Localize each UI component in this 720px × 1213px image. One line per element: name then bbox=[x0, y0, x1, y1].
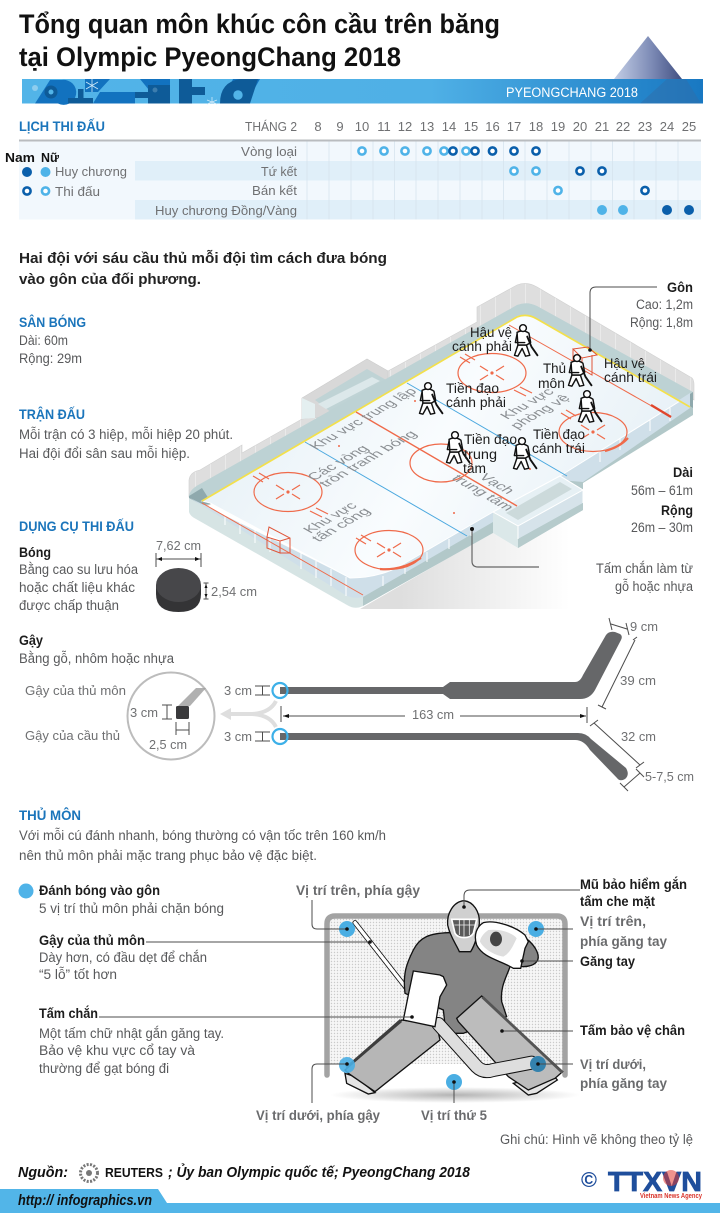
text block: goalie stick: Gậy của thủ môn bbox=[39, 933, 145, 948]
zone labels on ice bbox=[299, 385, 574, 544]
intro text: Hai đội với sáu cầu thủ mỗi đội tìm cách đưa bóng bbox=[19, 250, 387, 267]
table header months and days: 17 bbox=[507, 119, 521, 134]
text block: goalie stick bbox=[39, 933, 207, 982]
schedule dots: women rings bbox=[358, 147, 562, 194]
table header months and days: 8 bbox=[314, 119, 322, 134]
stick dimensions: 5-7,5 cm bbox=[645, 769, 694, 784]
text block: equipment: DỤNG CỤ THI ĐẤU bbox=[19, 518, 134, 534]
goalie labels: Mũ bảo hiểm gắn bbox=[580, 877, 687, 892]
callout: boards: gỗ hoặc nhựa bbox=[615, 579, 693, 594]
goalie labels: Vị trí trên, bbox=[580, 914, 646, 929]
table header months and days: 11 bbox=[377, 119, 391, 134]
banner: PyeongChang 2018: PYEONGCHANG 2018 bbox=[506, 85, 638, 100]
stick dimensions bbox=[224, 618, 694, 791]
table header months and days: 18 bbox=[529, 119, 543, 134]
front bench bbox=[493, 476, 583, 548]
legend: shots on goal bbox=[18, 883, 224, 916]
goalie labels: Găng tay bbox=[580, 954, 635, 969]
text block: stick: Gậy của thủ môn bbox=[25, 683, 126, 698]
footer bar: http:// infographics.vn bbox=[18, 1193, 152, 1209]
callout: rink size: 26m – 30m bbox=[631, 520, 693, 535]
goalie stick bbox=[280, 632, 622, 699]
title: Tổng quan môn khúc côn cầu trên băng bbox=[19, 9, 500, 39]
note: Ghi chú: Hình vẽ không theo tỷ lệ bbox=[500, 1132, 693, 1147]
goalie labels bbox=[256, 877, 687, 1123]
stick dimensions: 9 cm bbox=[630, 619, 658, 634]
legend: Thi đấu bbox=[55, 184, 100, 199]
callout: goal: Cao: 1,2m bbox=[636, 297, 693, 312]
ring markers bbox=[272, 683, 288, 744]
ice surface bbox=[202, 315, 680, 578]
heading: schedule: LỊCH THI ĐẤU bbox=[19, 118, 105, 134]
panel: schedule bbox=[5, 118, 701, 220]
goals bbox=[267, 347, 597, 553]
table header months and days: 14 bbox=[442, 119, 456, 134]
zone labels on ice: phòng vệ bbox=[506, 392, 574, 431]
table header months and days bbox=[245, 119, 696, 134]
footer bar bbox=[0, 1189, 720, 1213]
zone labels on ice: trung tâm bbox=[448, 472, 518, 513]
row labels bbox=[155, 144, 297, 218]
schedule dots: men rings bbox=[449, 147, 649, 194]
callout: rink size bbox=[631, 465, 693, 535]
player labels: môn bbox=[538, 376, 565, 391]
text block: equipment: Bóng bbox=[19, 545, 51, 560]
center dots bbox=[286, 371, 595, 552]
zone labels on ice: Vạch bbox=[476, 471, 519, 496]
goalie labels: Vị trí trên, phía gậy bbox=[296, 883, 420, 898]
text block: blocker: Bảo vệ khu vực cổ tay và bbox=[39, 1043, 195, 1058]
goalie labels: phía găng tay bbox=[580, 1076, 667, 1091]
banner: PyeongChang 2018 bbox=[22, 79, 703, 105]
glass panel lines bbox=[225, 408, 670, 596]
player labels: cánh trái bbox=[532, 441, 585, 456]
stick cross-section magnifier: 2,5 cm bbox=[149, 737, 187, 752]
goalie body bbox=[404, 933, 510, 1033]
source line bbox=[18, 1163, 471, 1182]
shot spots bbox=[339, 921, 546, 1090]
players bbox=[420, 325, 601, 469]
text block: goalie: Với mỗi cú đánh nhanh, bóng thường có vận tốc trên 160 km/h bbox=[19, 828, 386, 843]
face-off circles bbox=[253, 354, 628, 570]
logo: TTXVN: © bbox=[581, 1169, 598, 1192]
text block: stick: Bằng gỗ, nhôm hoặc nhựa bbox=[19, 651, 174, 666]
blocker bbox=[403, 971, 447, 1027]
table rows bbox=[19, 142, 701, 220]
logo: TTXVN: TTXVN bbox=[608, 1166, 702, 1197]
stick cross-section magnifier bbox=[128, 672, 214, 760]
text block: goalie bbox=[19, 806, 386, 863]
text block: stick bbox=[19, 633, 174, 743]
icon: puck bbox=[156, 538, 257, 612]
zone labels on ice: Khu vực bbox=[496, 386, 557, 421]
stick dimensions: 3 cm bbox=[224, 683, 252, 698]
title bbox=[19, 9, 500, 72]
callout: rink size: 56m – 61m bbox=[631, 483, 693, 498]
rink front glass bbox=[190, 393, 690, 598]
player labels: Hậu vệ bbox=[604, 356, 645, 371]
rink glass corners bbox=[189, 488, 212, 505]
title: tại Olympic PyeongChang 2018 bbox=[19, 42, 401, 72]
player labels: Tiền đạo bbox=[446, 381, 499, 396]
row labels: Bán kết bbox=[252, 183, 297, 198]
text block: equipment: hoặc chất liệu khác bbox=[19, 580, 135, 595]
source line: ; Ủy ban Olympic quốc tế; PyeongChang 2018 bbox=[168, 1163, 471, 1181]
legend: shots on goal: Đánh bóng vào gôn bbox=[39, 883, 160, 898]
player labels: cánh phải bbox=[446, 395, 506, 410]
callout: boards: Tấm chắn làm từ bbox=[596, 561, 693, 576]
icon: puck: 2,54 cm bbox=[211, 584, 257, 599]
player labels: trung bbox=[464, 447, 497, 462]
text block: blocker bbox=[39, 1006, 224, 1076]
stick dimensions: 32 cm bbox=[621, 729, 656, 744]
stick dimensions: 163 cm bbox=[412, 707, 454, 722]
goalie arm bbox=[517, 938, 538, 967]
legend: shots on goal: 5 vị trí thủ môn phải chặn bóng bbox=[39, 901, 224, 916]
table header months and days: THÁNG 2 bbox=[245, 119, 297, 134]
text block: match bbox=[19, 405, 233, 461]
text block: rink: Rộng: 29m bbox=[19, 351, 82, 366]
left leg pad bbox=[345, 1019, 440, 1094]
legend: Nữ bbox=[41, 150, 60, 165]
goalie labels: Vị trí dưới, bbox=[580, 1057, 646, 1072]
player labels: Tiền đạo bbox=[464, 432, 517, 447]
rink lines bbox=[202, 315, 690, 595]
rink slab: left side bbox=[189, 495, 363, 608]
legend: Nam bbox=[5, 150, 35, 165]
player labels: Hậu vệ bbox=[470, 325, 512, 340]
arrow: to cross-section bbox=[220, 701, 276, 727]
stick cross-section magnifier: 3 cm bbox=[130, 705, 158, 720]
text block: rink bbox=[19, 313, 86, 366]
player labels: tâm bbox=[463, 461, 486, 476]
player stick bbox=[280, 733, 628, 780]
goal net and frame bbox=[327, 916, 565, 1075]
catching glove bbox=[475, 922, 528, 968]
table header months and days: 25 bbox=[682, 119, 696, 134]
icon: mountain bbox=[614, 36, 682, 79]
text block: blocker: Một tấm chữ nhật gắn găng tay. bbox=[39, 1026, 224, 1041]
source line: REUTERS bbox=[105, 1165, 163, 1180]
stick dimensions: 39 cm bbox=[620, 673, 656, 688]
leader lines bbox=[99, 890, 580, 1103]
goalie labels: Vị trí dưới, phía gậy bbox=[256, 1108, 380, 1123]
text block: match: Hai đội đổi sân sau mỗi hiệp. bbox=[19, 446, 190, 461]
row labels: Tứ kết bbox=[261, 164, 297, 179]
helmet bbox=[448, 901, 479, 952]
table header months and days: 24 bbox=[660, 119, 674, 134]
rink back bench bbox=[302, 359, 388, 419]
zone labels on ice: Khu vực trung lập bbox=[305, 385, 420, 452]
player labels: cánh trái bbox=[604, 370, 657, 385]
player labels: cánh phải bbox=[452, 339, 512, 354]
row labels: Vòng loại bbox=[241, 144, 297, 159]
text block: goalie: THỦ MÔN bbox=[19, 806, 81, 823]
callout: goal: Gôn bbox=[667, 280, 693, 295]
zone labels on ice: Các vòng bbox=[303, 442, 372, 483]
text block: equipment bbox=[19, 518, 138, 613]
table header months and days: 13 bbox=[420, 119, 434, 134]
rink back walls bbox=[189, 283, 694, 510]
text block: stick: Gậy bbox=[19, 633, 43, 648]
table header months and days: 16 bbox=[485, 119, 500, 134]
zone labels on ice: Khu vực bbox=[299, 500, 360, 535]
text block: blocker: thường để gạt bóng đi bbox=[39, 1061, 169, 1076]
callout: boards bbox=[470, 527, 693, 594]
rink boards top bbox=[189, 303, 693, 504]
intro text bbox=[19, 250, 387, 288]
rink slab: right side bbox=[363, 400, 693, 606]
table header months and days: 15 bbox=[464, 119, 478, 134]
goalie paddle bbox=[438, 1024, 532, 1071]
goalie labels: Tấm bảo vệ chân bbox=[580, 1023, 685, 1038]
intro text: vào gôn của đối phương. bbox=[19, 271, 201, 288]
text block: equipment: Bằng cao su lưu hóa bbox=[19, 562, 138, 577]
text block: goalie stick: “5 lỗ” tốt hơn bbox=[39, 967, 117, 982]
text block: rink: SÂN BÓNG bbox=[19, 313, 86, 330]
goalie labels: Vị trí thứ 5 bbox=[421, 1108, 487, 1123]
text block: match: TRẬN ĐẤU bbox=[19, 405, 85, 422]
icon: puck: 7,62 cm bbox=[156, 538, 201, 553]
callout: rink size: Dài bbox=[673, 465, 693, 480]
right leg pad bbox=[457, 996, 563, 1095]
callout: goal bbox=[588, 280, 693, 352]
legend: Huy chương bbox=[55, 164, 127, 179]
legend bbox=[5, 150, 127, 199]
text block: equipment: được chấp thuận bbox=[19, 598, 119, 613]
callout: goal: Rộng: 1,8m bbox=[630, 315, 693, 330]
text block: goalie stick: Dày hơn, có đầu dẹt để chắn bbox=[39, 950, 207, 965]
ice rink illustration bbox=[189, 283, 694, 609]
table header months and days: 9 bbox=[336, 119, 344, 134]
table header months and days: 10 bbox=[355, 119, 369, 134]
text block: blocker: Tấm chắn bbox=[39, 1006, 98, 1021]
table header months and days: 20 bbox=[573, 119, 587, 134]
goalie illustration bbox=[99, 877, 687, 1123]
table header months and days: 22 bbox=[616, 119, 630, 134]
logo: TTXVN: Vietnam News Agency bbox=[640, 1193, 702, 1200]
goalie labels: tấm che mặt bbox=[580, 894, 655, 909]
player labels: Thủ bbox=[543, 361, 566, 376]
text block: stick: Gậy của cầu thủ bbox=[25, 728, 120, 743]
goalie stick shaft bbox=[355, 923, 408, 991]
source line: Nguồn: bbox=[18, 1164, 68, 1181]
text block: match: Mỗi trận có 3 hiệp, mỗi hiệp 20 phút. bbox=[19, 427, 233, 442]
schedule dots: medal games bbox=[597, 205, 694, 215]
table header months and days: 21 bbox=[595, 119, 609, 134]
logo: TTXVN bbox=[581, 1166, 702, 1200]
callout: rink size: Rộng bbox=[661, 503, 693, 518]
floor shadow bbox=[330, 1087, 580, 1103]
stick dimensions: 3 cm bbox=[224, 729, 252, 744]
player labels: Tiền đạo bbox=[533, 427, 585, 442]
zone labels on ice: tấn công bbox=[307, 505, 374, 544]
table header months and days: 23 bbox=[638, 119, 652, 134]
player labels bbox=[446, 325, 657, 476]
text block: rink: Dài: 60m bbox=[19, 333, 68, 348]
table header months and days: 19 bbox=[551, 119, 565, 134]
zone labels on ice: tròn tranh bóng bbox=[315, 428, 420, 489]
row labels: Huy chương Đồng/Vàng bbox=[155, 203, 297, 218]
table header months and days: 12 bbox=[398, 119, 412, 134]
goalie labels: phía găng tay bbox=[580, 934, 667, 949]
text block: goalie: nên thủ môn phải mặc trang phục bảo vệ đặc biệt. bbox=[19, 848, 317, 863]
